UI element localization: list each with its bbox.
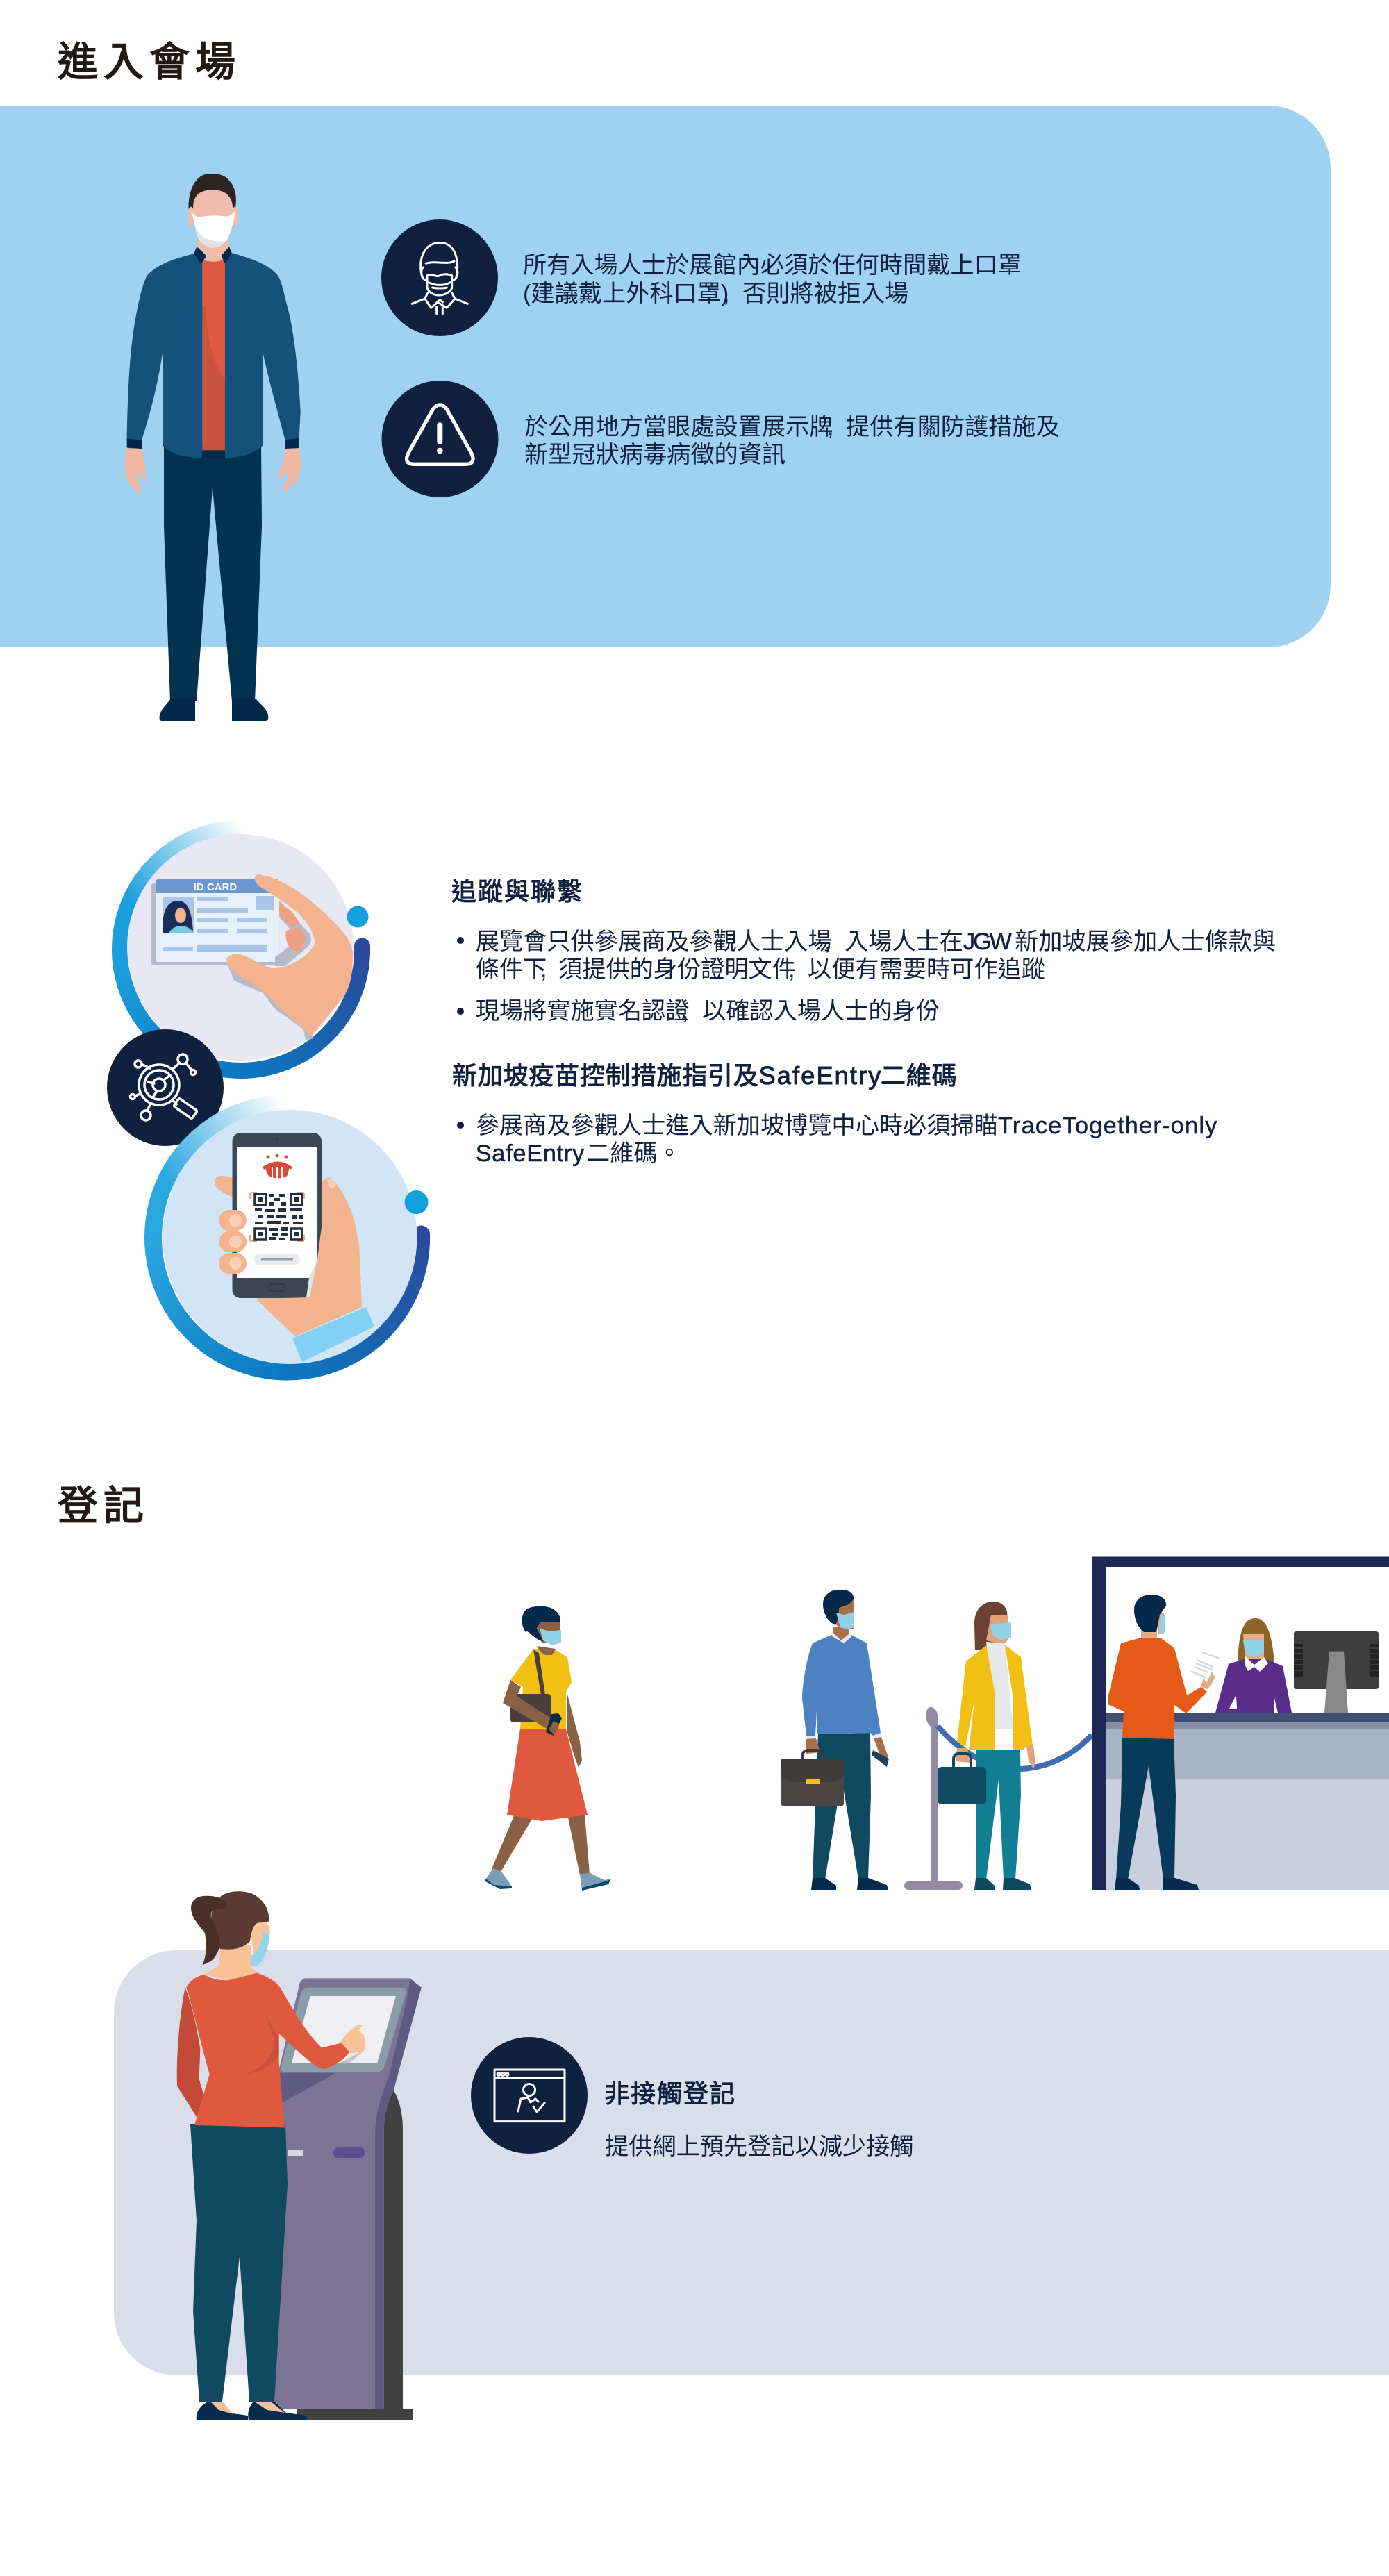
list: SafeEntry bullet: 二維碼。 [586,1140,681,1167]
list: tracing bullets: 以便有需要時可作追蹤 [808,956,1045,983]
icon: person wearing mask [381,219,498,336]
text: mask requirement [523,252,1022,307]
illustration: receptionist [1215,1618,1292,1713]
text: contactless registration: 非接觸登記 [604,2079,736,2108]
illustration: walking woman [485,1606,611,1891]
list: tracing bullets: , [682,998,689,1024]
list: tracing bullets: JGW [963,929,1013,955]
text: mask requirement: 否則將被拒入場 [742,281,908,307]
list: tracing bullets: 現場將實施實名認證 [476,998,689,1024]
text: mask requirement: (建議戴上外科口罩) [523,281,729,307]
list: SafeEntry bullet: TraceTogether-only [998,1113,1218,1139]
panel: blue entry panel [0,106,1331,647]
icon: contact tracing magnifier [107,1029,224,1146]
list: SafeEntry bullet [457,1113,1218,1167]
list: tracing bullets: 須提供的身份證明文件 [558,956,796,983]
list: SafeEntry bullet: 參展商及參觀人士進入新加坡博覽中心時必須掃瞄 [476,1113,998,1139]
list: tracing bullets: 新加坡展參加人士條款與 [1015,929,1276,955]
text: contactless registration: 提供網上預先登記以減少接觸 [605,2134,913,2160]
illustration: registration kiosk [273,1978,422,2420]
illustration: ID card in hand [119,828,368,1071]
title: entering the venue: 進入會場 [58,40,241,85]
list: tracing bullets: 入場人士在 [845,929,963,955]
list: tracing bullets: , [824,929,831,955]
icon: warning triangle [382,381,499,497]
text: contactless registration [604,2079,913,2160]
panel: grey registration panel [114,1950,1389,2375]
text: mask requirement: , [723,281,729,307]
illustration: phone with QR code [153,1104,428,1372]
illustration: man with briefcase [781,1590,889,1890]
illustration: computer monitor [1294,1631,1379,1713]
list: tracing bullets: , [788,956,795,983]
list: tracing bullets: , [540,956,547,983]
illustration: service counter [1092,1557,1389,1890]
illustration: ID card in hand: ID CARD [194,881,237,893]
illustration: queue stanchion and rope [904,1707,1092,1890]
text: notice boards: 提供有關防護措施及 [846,414,1060,440]
text: mask requirement: 所有入場人士於展館內必須於任何時間戴上口罩 [523,252,1022,279]
title: registration: 登記 [58,1484,149,1529]
list: tracing bullets [457,929,1276,1024]
illustration: man at counter in orange [1108,1595,1220,1890]
text: notice boards: 新型冠狀病毒病徵的資訊 [524,442,785,468]
illustration: man wearing mask [125,174,301,721]
heading: SafeEntry guidelines: 二維碼 [881,1061,957,1090]
list: SafeEntry bullet: SafeEntry [476,1140,585,1167]
list: tracing bullets: 以確認入場人士的身份 [702,998,940,1024]
icon: online registration window [471,2037,588,2154]
heading: SafeEntry guidelines: 新加坡疫苗控制措施指引及 [452,1061,759,1090]
text: notice boards: , [827,414,833,440]
text: notice boards [524,414,1060,468]
list: tracing bullets: 展覽會只供參展商及參觀人士入場 [476,929,832,955]
illustration: woman in yellow cardigan [938,1602,1035,1890]
list: tracing bullets: 條件下 [476,956,547,983]
heading: tracing and contact: 追蹤與聯繫 [451,877,583,906]
text: notice boards: 於公用地方當眼處設置展示牌 [524,414,833,440]
heading: SafeEntry guidelines: SafeEntry [759,1061,882,1090]
illustration: woman using kiosk [177,1891,366,2420]
